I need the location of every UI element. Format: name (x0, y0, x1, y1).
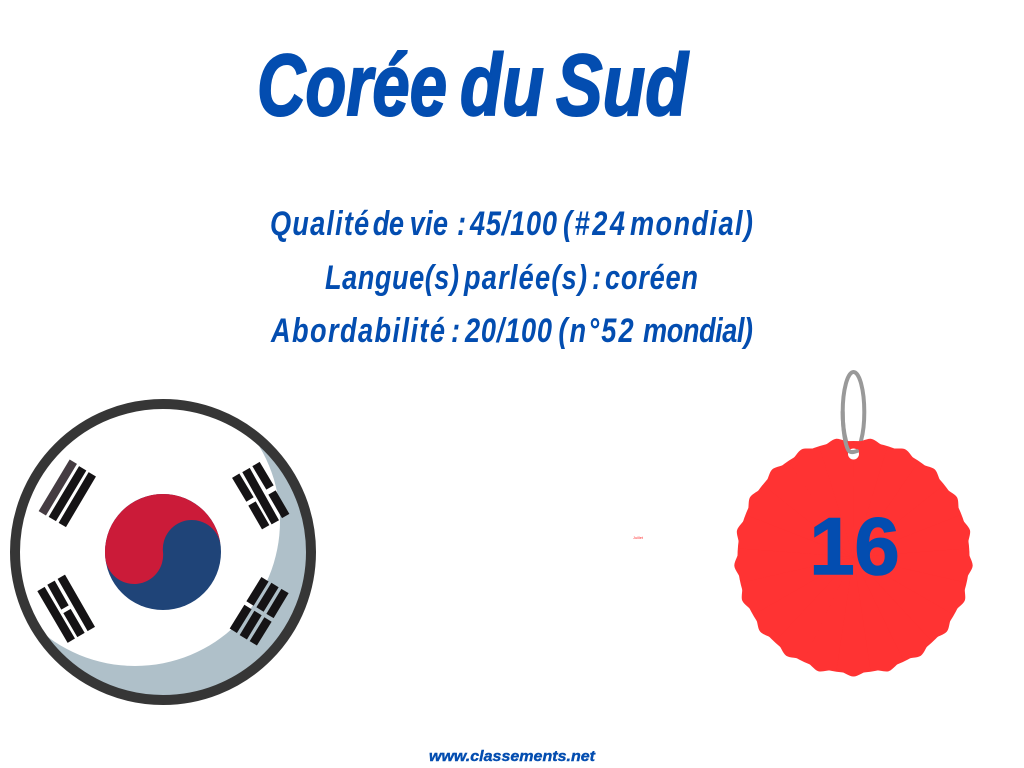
fact: languages: : (592, 258, 601, 297)
fact: quality of life: (#24 (563, 204, 625, 243)
flag white field (20, 409, 280, 666)
rank number: 16 (809, 502, 900, 592)
trigram: bottom right (233, 579, 285, 643)
fact: languages: coréen (605, 258, 698, 297)
tag ring, front (843, 412, 857, 452)
taegeuk symbol (105, 494, 221, 610)
fact: affordability: : (451, 311, 460, 350)
tag hole (848, 448, 859, 460)
fact: quality of life: 45/100 (469, 204, 557, 243)
fact: affordability: Abordabilité (270, 311, 445, 350)
tiny caption: Juillet (633, 536, 643, 540)
fact: affordability: (n°52 (558, 311, 634, 350)
fact: languages: parlée(s) (463, 258, 587, 297)
fact: quality of life: Qualité (270, 204, 369, 243)
title: Corée (257, 37, 447, 134)
icon: South Korea flag badge (0, 376, 311, 700)
trigram: bottom left (41, 577, 91, 641)
fact: quality of life: vie (410, 204, 448, 243)
fact: affordability (270, 311, 753, 350)
rank tag (733, 372, 974, 676)
fact: affordability: 20/100 (464, 311, 552, 350)
trigram: top right (236, 464, 286, 527)
title: du (460, 37, 544, 134)
fact: quality of life: de (373, 204, 404, 243)
fact: quality of life: : (457, 204, 466, 243)
trigram: top left (42, 462, 92, 525)
fact: quality of life (270, 204, 753, 243)
fact: affordability: mondial) (643, 311, 753, 350)
title: Sud (556, 37, 689, 134)
footer website: www.classements.net (429, 748, 596, 765)
fact: languages: Langue(s) (325, 258, 459, 297)
text block: country facts (270, 204, 753, 350)
fact: quality of life: mondial) (630, 204, 753, 243)
title (257, 37, 689, 134)
flag shadow crescent (19, 408, 307, 696)
tag scalloped body (733, 436, 974, 676)
tag ring, back (843, 372, 864, 452)
flag outer ring (15, 404, 311, 700)
fact: languages (325, 258, 698, 297)
